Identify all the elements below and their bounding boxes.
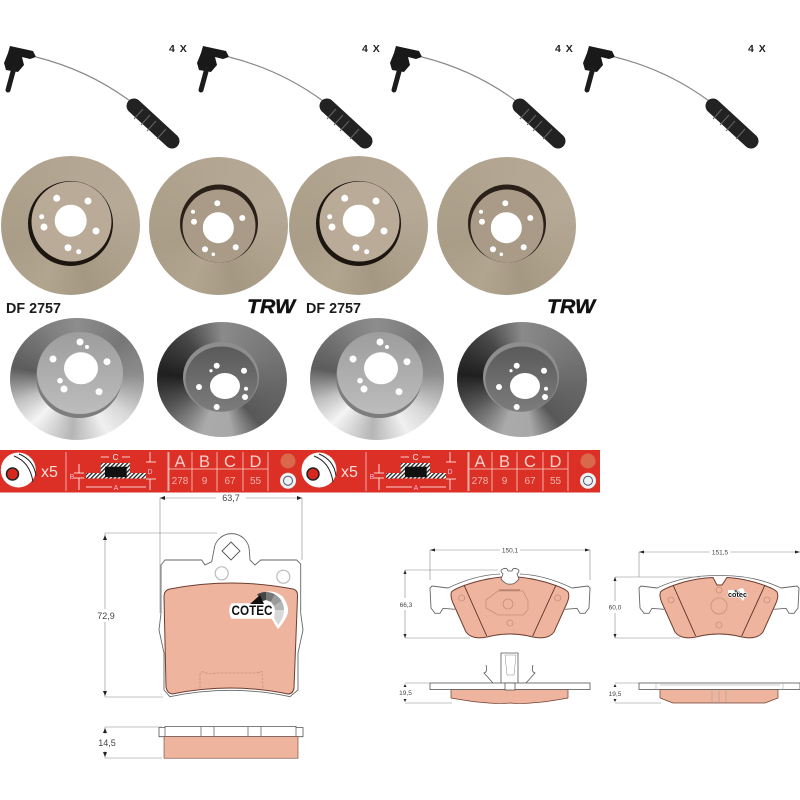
- pad 1 thickness dimension: 14,5: [98, 738, 116, 748]
- dimension table: B: [199, 453, 210, 471]
- dimension table: A: [174, 453, 186, 471]
- dimension table right: A: [474, 453, 486, 471]
- section diagram right: [366, 452, 469, 492]
- pad 1 height dimension: [95, 533, 217, 697]
- quantity x5 right: x5: [341, 464, 358, 481]
- COTEC logo: COTEC: [232, 603, 273, 618]
- COTEC logo: [230, 592, 287, 628]
- pad 1 width dimension: [160, 493, 302, 613]
- dimension table right: 9: [502, 476, 508, 487]
- dimension table: 278: [172, 476, 189, 487]
- friction lining: [660, 578, 778, 638]
- certification badges: [280, 454, 296, 489]
- brake pad 1 side view: [159, 726, 303, 758]
- friction lining: [164, 583, 298, 694]
- rear disc 2: [157, 322, 287, 437]
- TRW logo right: TRW: [547, 296, 597, 318]
- quantity x5: x5: [41, 464, 58, 481]
- section diagram right: D: [447, 469, 453, 476]
- dimension table: 55: [250, 476, 261, 487]
- quantity label 2: 4 X: [362, 43, 381, 55]
- pad 3 thickness dimension: [609, 683, 661, 703]
- pad 2 width dimension: [430, 548, 590, 580]
- red spec band right: [301, 450, 600, 492]
- section diagram: [66, 452, 169, 492]
- quantity label 4: 4 X: [748, 43, 767, 55]
- pad 3 height dimension: 60,0: [609, 604, 622, 612]
- dimension table right: [468, 452, 568, 491]
- front disc 3: [289, 156, 428, 295]
- pad 2 width dimension: 150,1: [502, 548, 519, 554]
- dimension table right: D: [550, 453, 562, 471]
- dimension table right: 67: [524, 476, 536, 487]
- pad 1 thickness dimension: [98, 727, 162, 758]
- section diagram: B: [70, 474, 75, 481]
- section diagram right: C: [413, 453, 419, 462]
- pad 1 width dimension: 63,7: [222, 493, 240, 503]
- friction lining: [451, 577, 569, 638]
- brake pad 3 side view: [639, 683, 800, 703]
- pad 2 height dimension: 66,3: [400, 602, 413, 609]
- front disc 1: [1, 156, 140, 295]
- brake pad 3 front view: [639, 575, 799, 638]
- COTEC logo small: [728, 588, 747, 601]
- quantity label 3: 4 X: [555, 43, 574, 55]
- wear sensor 3: [390, 46, 558, 141]
- section diagram: C: [113, 453, 119, 462]
- quantity label 1: 4 X: [169, 43, 188, 55]
- wear sensor 4: [583, 46, 751, 141]
- rear disc 1: [10, 318, 144, 440]
- front disc 4: [437, 157, 576, 295]
- TRW logo left: TRW: [247, 296, 297, 318]
- brake pad 1 front view: [159, 534, 303, 697]
- brake pad 2 side view: [430, 653, 590, 703]
- rear disc 3: [310, 318, 444, 440]
- icon: bolt disc right: [302, 452, 336, 488]
- COTEC logo small: cotec: [728, 592, 747, 599]
- pad 3 width dimension: 151,5: [712, 550, 729, 556]
- pad 2 thickness dimension: [399, 683, 452, 703]
- dimension table: C: [224, 453, 236, 471]
- pad 3 width dimension: [639, 550, 800, 577]
- brake pad 2 front view: [430, 568, 590, 638]
- part number right: DF 2757: [306, 300, 361, 317]
- pad 3 height dimension: [609, 577, 700, 638]
- dimension table: [168, 452, 268, 491]
- dimension table: 9: [202, 476, 208, 487]
- wear sensor 1: [4, 46, 172, 141]
- wear sensor 2: [197, 46, 365, 141]
- dimension table right: 55: [550, 476, 561, 487]
- dimension table: D: [250, 453, 262, 471]
- pad 3 thickness dimension: 19,5: [609, 691, 622, 698]
- section diagram: D: [147, 469, 153, 476]
- pad 2 height dimension: [400, 570, 498, 638]
- icon: bolt disc: [1, 452, 36, 488]
- section diagram right: B: [370, 474, 375, 481]
- pad 2 thickness dimension: 19,5: [399, 690, 412, 697]
- rear disc 4: [457, 322, 587, 437]
- certification badges right: [580, 454, 596, 489]
- section diagram: A: [114, 485, 119, 492]
- red spec band left: [0, 450, 301, 492]
- part number left: DF 2757: [6, 300, 61, 317]
- section diagram right: A: [414, 485, 419, 492]
- dimension table right: B: [499, 453, 510, 471]
- dimension table right: 278: [472, 476, 489, 487]
- pad 1 height dimension: 72,9: [97, 611, 115, 621]
- front disc 2: [149, 157, 288, 295]
- dimension table: 67: [224, 476, 236, 487]
- dimension table right: C: [524, 453, 536, 471]
